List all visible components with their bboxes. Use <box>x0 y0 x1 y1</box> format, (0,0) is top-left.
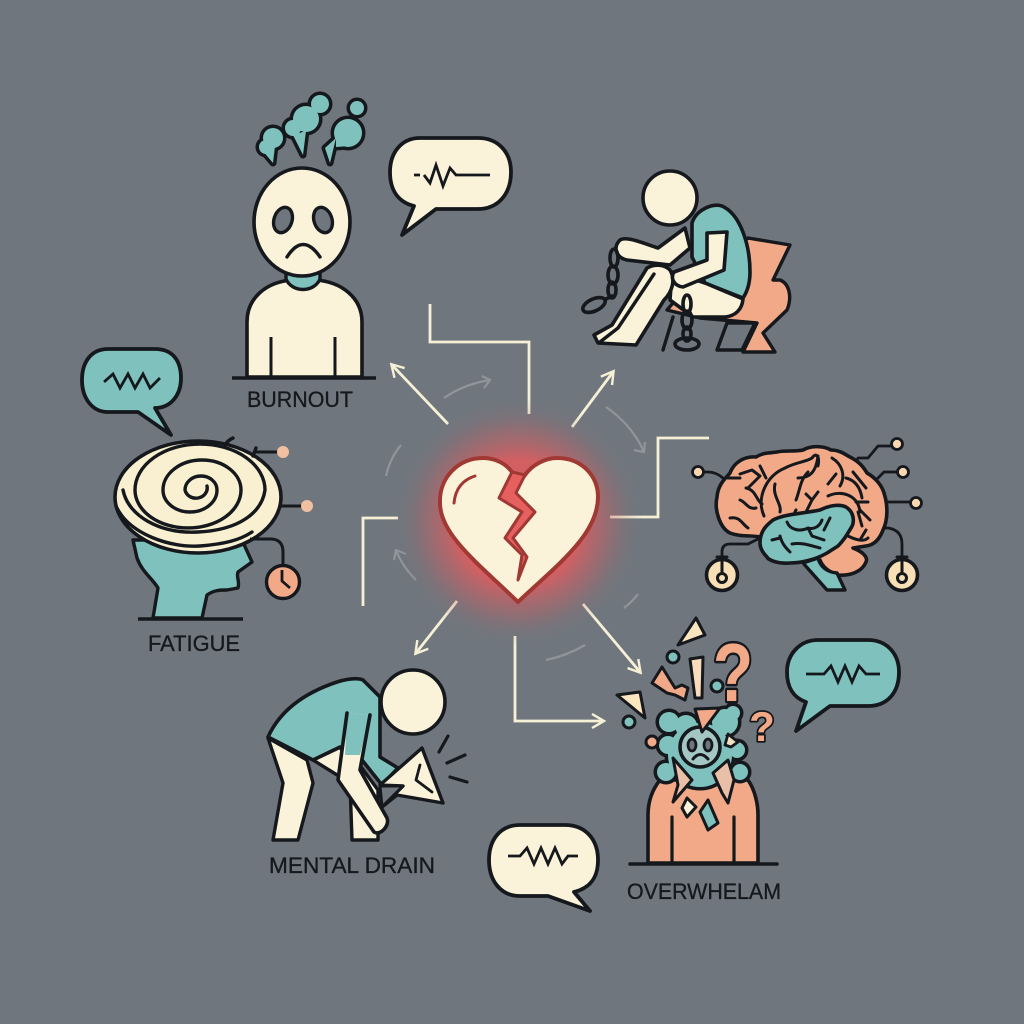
panel: overwhelm: ? <box>749 703 775 750</box>
speech bubble: top centre <box>390 138 511 235</box>
icon: thigh <box>670 272 743 317</box>
icon: steam clouds <box>259 95 364 163</box>
icon: legs <box>594 265 673 345</box>
speech bubble: bottom centre <box>489 825 598 911</box>
icon: chains <box>581 249 699 350</box>
icon: nodes and clock <box>250 452 302 566</box>
icon: flying shards <box>695 708 720 732</box>
label: mental drain: MENTAL DRAIN <box>269 853 435 878</box>
icon: impact lines <box>439 736 467 782</box>
panel: wired brain <box>692 438 922 590</box>
icon: back leg <box>268 738 313 840</box>
icon: torso <box>268 679 398 785</box>
icon: chair <box>667 238 790 352</box>
icon: head <box>133 540 252 618</box>
icon: front leg <box>313 745 378 840</box>
speech bubble: fatigue <box>82 349 181 435</box>
icon: arm <box>338 713 388 833</box>
icon: cerebellum <box>760 505 853 563</box>
icon: pendants <box>706 560 738 590</box>
icon: broken heart <box>393 397 643 647</box>
icon: sad face <box>680 727 720 767</box>
icon: brain <box>716 447 887 575</box>
label: overwhelm: OVERWHELAM <box>627 879 781 904</box>
speech bubble: overwhelm <box>787 640 899 731</box>
icon: brain stem <box>803 558 845 590</box>
panel: fatigue <box>82 349 313 656</box>
icon: exploding cloud <box>657 706 748 787</box>
icon: torso <box>692 205 750 298</box>
icon: wires <box>698 446 916 556</box>
icon: envelope bag <box>380 748 443 807</box>
icon: swirl brain <box>115 441 281 553</box>
icon: question marks: ? <box>713 626 753 719</box>
label: burnout: BURNOUT <box>247 387 353 412</box>
label: fatigue: FATIGUE <box>148 631 240 656</box>
panel: overwhelm <box>617 618 781 904</box>
icon: head <box>381 670 445 734</box>
icon: torn shards <box>673 758 692 802</box>
icon: torso <box>648 780 758 863</box>
icon: left arm <box>616 228 690 265</box>
panel: burnout <box>232 95 376 412</box>
icon: right arm <box>672 232 727 287</box>
faint circular arrows <box>386 376 645 660</box>
connector lines and arrows <box>363 304 709 721</box>
panel: mental drain <box>268 670 467 878</box>
panel: chained figure <box>581 171 790 352</box>
icon: burnout figure <box>247 280 362 377</box>
